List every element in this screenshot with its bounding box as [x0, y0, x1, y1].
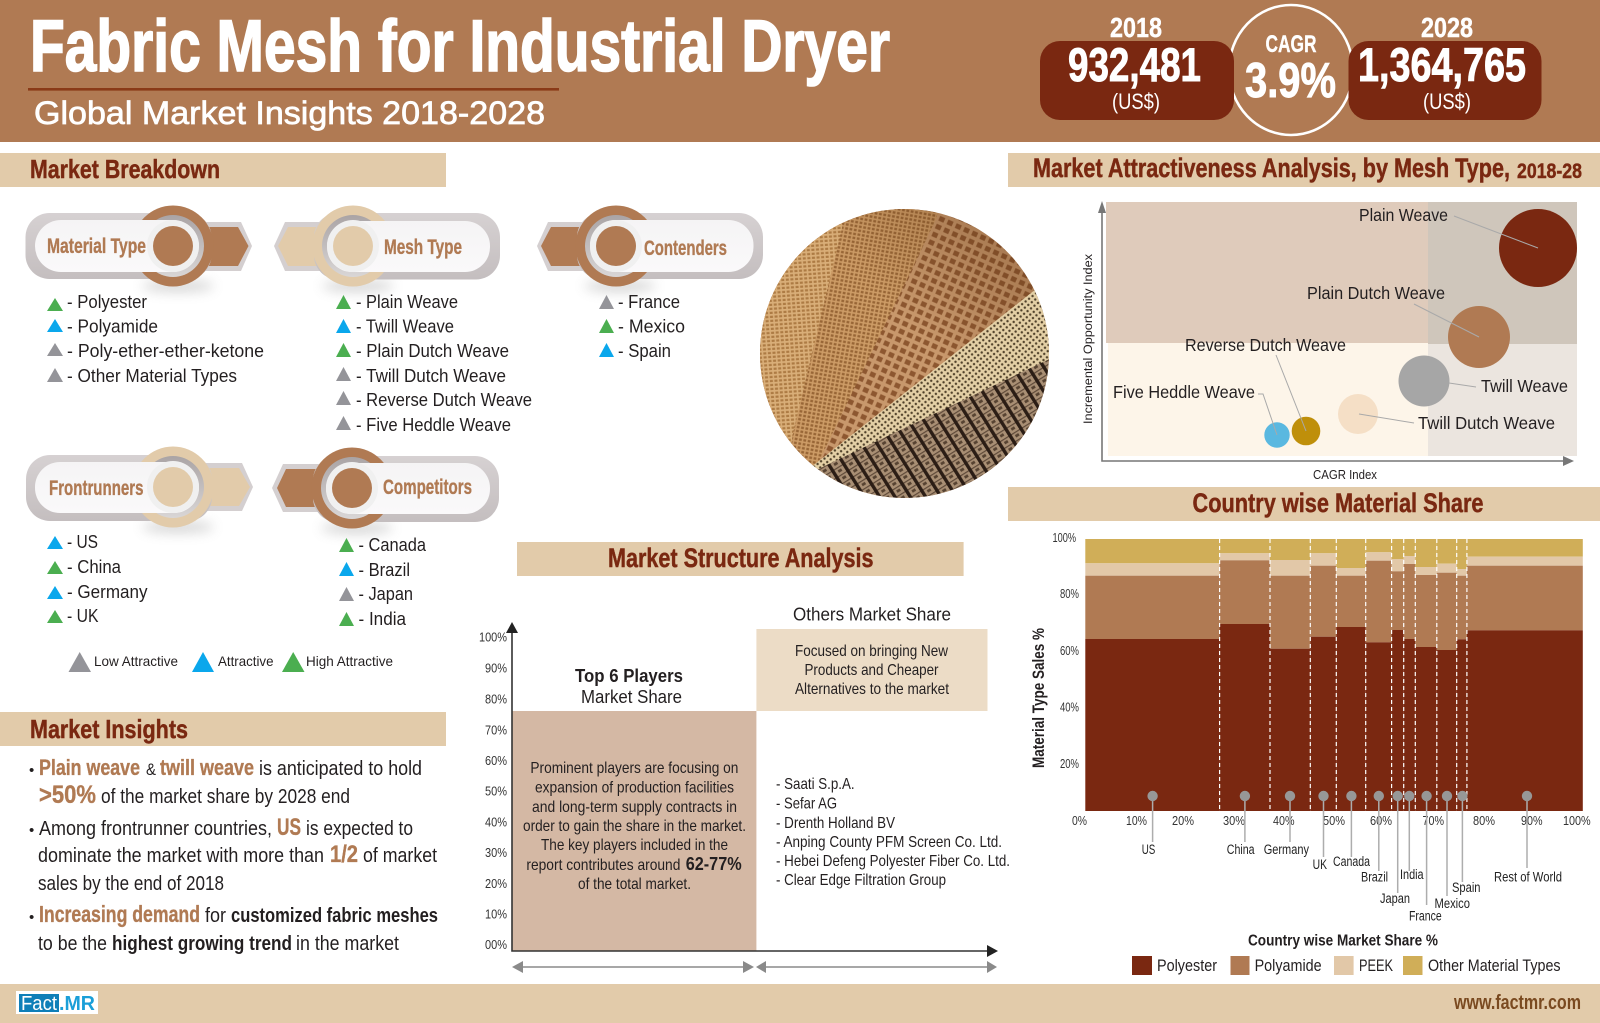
insight 3: Increasing demand [39, 901, 200, 927]
x axis ticks [1072, 814, 1591, 828]
insight 2: 1/2 [330, 841, 358, 868]
bubble: Reverse Dutch Weave [1185, 335, 1346, 445]
list: mesh types: - Twill Weave [356, 316, 454, 336]
2018 value [1040, 12, 1234, 120]
insight 3: highest growing trend [112, 933, 292, 955]
text: top players description: order to gain the share in the market. [523, 818, 746, 835]
heading: Market Structure Analysis [517, 542, 964, 576]
text: key players list: - Clear Edge Filtration Group [776, 872, 946, 889]
heading: Market Insights: Market Insights [30, 714, 188, 744]
list: frontrunners: - UK [67, 606, 98, 626]
x axis ticks: 80% [1473, 814, 1495, 828]
y ticks: 80% [485, 692, 507, 706]
insight 1: >50% [39, 781, 96, 809]
x axis ticks: 40% [1273, 814, 1294, 828]
y axis title: Material Type Sales % [1029, 628, 1048, 768]
2028 value: 1,364,765 [1358, 38, 1526, 91]
label: top 6 players [575, 666, 683, 707]
2018 value: (US$) [1112, 89, 1160, 114]
arrow: others span [756, 961, 997, 973]
bubble: Plain Dutch Weave [1307, 283, 1510, 368]
list: mesh types: - Twill Dutch Weave [356, 366, 506, 386]
arrow: top players span [512, 961, 754, 973]
y ticks: 90% [485, 662, 507, 676]
heading: Market Structure Analysis: Market Structure Analysis [608, 543, 874, 573]
legend: attractiveness: Attractive [218, 653, 274, 669]
x axis ticks: 100% [1563, 814, 1591, 828]
text: top players description [523, 760, 746, 893]
mekko chart: country wise material share [1029, 531, 1591, 975]
country pins and labels: Germany [1264, 842, 1309, 857]
axes [506, 622, 998, 957]
list: competitors [339, 535, 427, 629]
country pins and labels: UK [1313, 857, 1327, 872]
country pins and labels: Canada [1333, 854, 1370, 869]
heading: Market Insights [0, 712, 446, 746]
country pins and labels: France [1409, 909, 1442, 924]
pill: Material Type [26, 206, 252, 292]
bubble: Five Heddle Weave: Five Heddle Weave [1113, 382, 1255, 402]
y axis ticks: 80% [1060, 587, 1079, 601]
legend: materials: Other Material Types [1428, 956, 1561, 975]
legend: attractiveness: High Attractive [306, 653, 393, 669]
label: top 6 players: Market Share [581, 687, 682, 707]
y axis ticks: 100% [1052, 531, 1076, 545]
list: contenders: - Mexico [618, 316, 685, 336]
pill: Frontrunners: Frontrunners [49, 477, 144, 500]
x axis ticks: 60% [1370, 814, 1392, 828]
y ticks: 60% [485, 754, 507, 768]
others block [756, 629, 988, 711]
list: material types: - Other Material Types [67, 366, 237, 386]
legend: materials: PEEK [1359, 956, 1393, 975]
list: material types: - Polyamide [67, 316, 158, 336]
text: others description: Alternatives to the market [795, 681, 949, 698]
bubble: Plain Weave [1359, 205, 1577, 287]
y ticks: 40% [485, 815, 507, 829]
y axis ticks: 20% [1060, 757, 1079, 771]
footer [0, 984, 1600, 1023]
x axis ticks: 50% [1323, 814, 1345, 828]
insight 1: Plain weave [39, 755, 140, 780]
text: others description: Focused on bringing New [795, 643, 948, 660]
image: fabric mesh circle [760, 209, 1049, 498]
text: top players description: expansion of production facilities [535, 780, 734, 796]
insight 1: is anticipated to hold [259, 758, 422, 780]
CAGR circle [1229, 5, 1353, 135]
2028 value: 2028 [1421, 12, 1473, 43]
list: contenders: - Spain [618, 341, 671, 361]
market structure chart [479, 605, 1010, 973]
y ticks: 20% [485, 877, 507, 891]
insight 1: twill weave [160, 755, 254, 780]
list: frontrunners: - Germany [67, 582, 148, 602]
insight 2 [29, 814, 437, 895]
country pins and labels: Japan [1380, 891, 1410, 906]
insight 3 [29, 901, 438, 955]
x axis ticks: 20% [1172, 814, 1194, 828]
list: contenders: - France [618, 292, 680, 312]
legend: attractiveness: Low Attractive [94, 653, 178, 669]
list: frontrunners: - China [67, 557, 122, 577]
y ticks [479, 631, 507, 952]
text: key players list: - Saati S.p.A. [776, 776, 855, 793]
top players block [512, 711, 756, 951]
label: top 6 players: Top 6 Players [575, 666, 683, 686]
x axis ticks: 0% [1072, 814, 1087, 828]
bubble chart [1083, 201, 1577, 482]
text: key players list: - Hebei Defeng Polyester Fiber Co. Ltd. [776, 853, 1010, 870]
text: top players description: report contributes around [526, 857, 680, 874]
heading: Country wise Material Share: Country wise Material Share [1192, 488, 1484, 518]
y axis ticks: 60% [1060, 644, 1079, 658]
list: mesh types: - Plain Weave [356, 292, 458, 312]
list: material types: - Poly-ether-ether-ketone [67, 341, 264, 361]
list: material types [47, 292, 264, 386]
list: mesh types: - Plain Dutch Weave [356, 341, 509, 361]
bubble: Twill Weave [1398, 356, 1568, 406]
insight 2: • [29, 822, 34, 839]
bubble: Reverse Dutch Weave: Reverse Dutch Weave [1185, 335, 1346, 355]
insight 1 [29, 755, 422, 809]
insight 1: & [146, 760, 157, 779]
text: key players list: - Sefar AG [776, 796, 837, 813]
insight 3: to be the [38, 933, 107, 955]
label: others market share: Others Market Share [793, 605, 951, 625]
insight 3: • [29, 909, 34, 926]
legend: materials: Polyamide [1255, 956, 1322, 975]
insight 2: is expected to [306, 818, 413, 840]
y ticks: 10% [485, 908, 507, 922]
insight 3: for [205, 905, 226, 927]
list: mesh types: - Five Heddle Weave [356, 415, 511, 435]
bubble: Five Heddle Weave [1113, 382, 1290, 448]
legend: attractiveness [68, 652, 393, 672]
list: frontrunners: - US [67, 532, 98, 552]
pill: Contenders [537, 206, 763, 292]
text: key players list: - Anping County PFM Screen Co. Ltd. [776, 834, 1002, 851]
pill: Material Type: Material Type [47, 235, 146, 258]
axis label: y: Incremental Opportunity Index [1083, 254, 1095, 424]
insight 2: sales by the end of 2018 [38, 873, 224, 895]
axis label: x: CAGR Index [1313, 468, 1378, 482]
text: key players list: - Drenth Holland BV [776, 815, 895, 832]
y ticks: 00% [485, 938, 507, 952]
subtitle: Global Market Insights 2018-2028 [34, 95, 545, 131]
logo: Fact.MR [16, 991, 98, 1015]
country pins and labels: Rest of World [1494, 870, 1562, 885]
text: key players list [776, 776, 1010, 889]
text: market insights [29, 755, 438, 955]
y axis ticks [1052, 531, 1079, 771]
bubble: Twill Dutch Weave [1338, 394, 1555, 434]
pill: Frontrunners [26, 446, 253, 533]
list: competitors: - India [358, 609, 407, 629]
2028 value [1348, 12, 1542, 120]
2028 value: (US$) [1423, 89, 1471, 114]
pill: Mesh Type [274, 206, 500, 292]
CAGR circle: CAGR [1266, 31, 1316, 58]
column segments [1085, 539, 1583, 811]
text: others description [795, 643, 949, 698]
country pins and labels: US [1142, 842, 1155, 857]
country pins and labels [1142, 791, 1562, 924]
y ticks: 50% [485, 784, 507, 798]
legend: materials: Polyester [1157, 956, 1217, 975]
list: competitors: - Japan [358, 584, 413, 604]
country pins and labels: China [1227, 842, 1255, 857]
heading: Country wise Material Share [1008, 487, 1600, 521]
pill: Competitors [272, 448, 499, 534]
bubble: Twill Weave: Twill Weave [1481, 376, 1568, 396]
x axis ticks: 90% [1521, 814, 1542, 828]
logo: Fact.MR: .MR [59, 993, 96, 1015]
insight 3: in the market [296, 933, 399, 955]
insight 2: of market [363, 845, 437, 867]
bubble: Twill Dutch Weave: Twill Dutch Weave [1418, 413, 1555, 433]
list: frontrunners [47, 532, 148, 626]
x axis title: Country wise Market Share % [1248, 933, 1438, 950]
y axis ticks: 40% [1060, 700, 1079, 714]
country pins and labels: Spain [1452, 880, 1480, 895]
y ticks: 100% [479, 631, 507, 645]
text: top players description: 62-77% [686, 854, 742, 874]
pill: Contenders: Contenders [644, 237, 727, 260]
heading: Market Breakdown: Market Breakdown [30, 154, 220, 184]
country pins and labels: India [1400, 867, 1424, 882]
pill: Competitors: Competitors [383, 476, 472, 499]
text: top players description: of the total market. [578, 876, 691, 893]
country pins and labels: Mexico [1434, 896, 1470, 911]
insight 2: US [277, 814, 301, 841]
list: contenders [599, 292, 685, 361]
header banner [0, 0, 1600, 142]
legend: materials [1132, 956, 1561, 975]
y ticks: 30% [485, 846, 507, 860]
insight 2: Among frontrunner countries, [39, 818, 272, 840]
country pins and labels: Brazil [1361, 870, 1388, 885]
text: top players description: The key players included in the [541, 837, 728, 854]
bubble: Plain Dutch Weave: Plain Dutch Weave [1307, 283, 1445, 303]
list: mesh types: - Reverse Dutch Weave [356, 390, 532, 410]
list: competitors: - Brazil [358, 560, 410, 580]
bubble: Plain Weave: Plain Weave [1359, 205, 1448, 225]
x axis ticks: 30% [1223, 814, 1245, 828]
x axis ticks: 70% [1422, 814, 1444, 828]
logo: Fact.MR: Fact [21, 993, 57, 1015]
x axis ticks: 10% [1126, 814, 1147, 828]
2018 value: 2018 [1110, 12, 1162, 43]
text: others description: Products and Cheaper [804, 662, 939, 679]
insight 3: customized fabric meshes [231, 905, 438, 927]
heading: Market Breakdown [0, 153, 446, 187]
insight 2: dominate the market with more than [38, 845, 324, 867]
2018 value: 932,481 [1068, 38, 1201, 91]
text: top players description: and long-term supply contracts in [532, 799, 737, 816]
list: mesh types [336, 292, 532, 435]
list: material types: - Polyester [67, 292, 147, 312]
pill: Mesh Type: Mesh Type [384, 236, 462, 259]
insight 1: • [29, 762, 34, 779]
insight 1: of the market share by 2028 end [101, 786, 350, 808]
heading: Market Attractiveness Analysis: 2018-28 [1517, 160, 1582, 183]
list: competitors: - Canada [358, 535, 427, 555]
text: top players description: Prominent players are focusing on [530, 760, 738, 777]
title rule [28, 88, 559, 91]
CAGR circle: 3.9% [1245, 54, 1336, 108]
title: Fabric Mesh for Industrial Dryer [30, 6, 890, 87]
y ticks: 70% [485, 723, 507, 737]
